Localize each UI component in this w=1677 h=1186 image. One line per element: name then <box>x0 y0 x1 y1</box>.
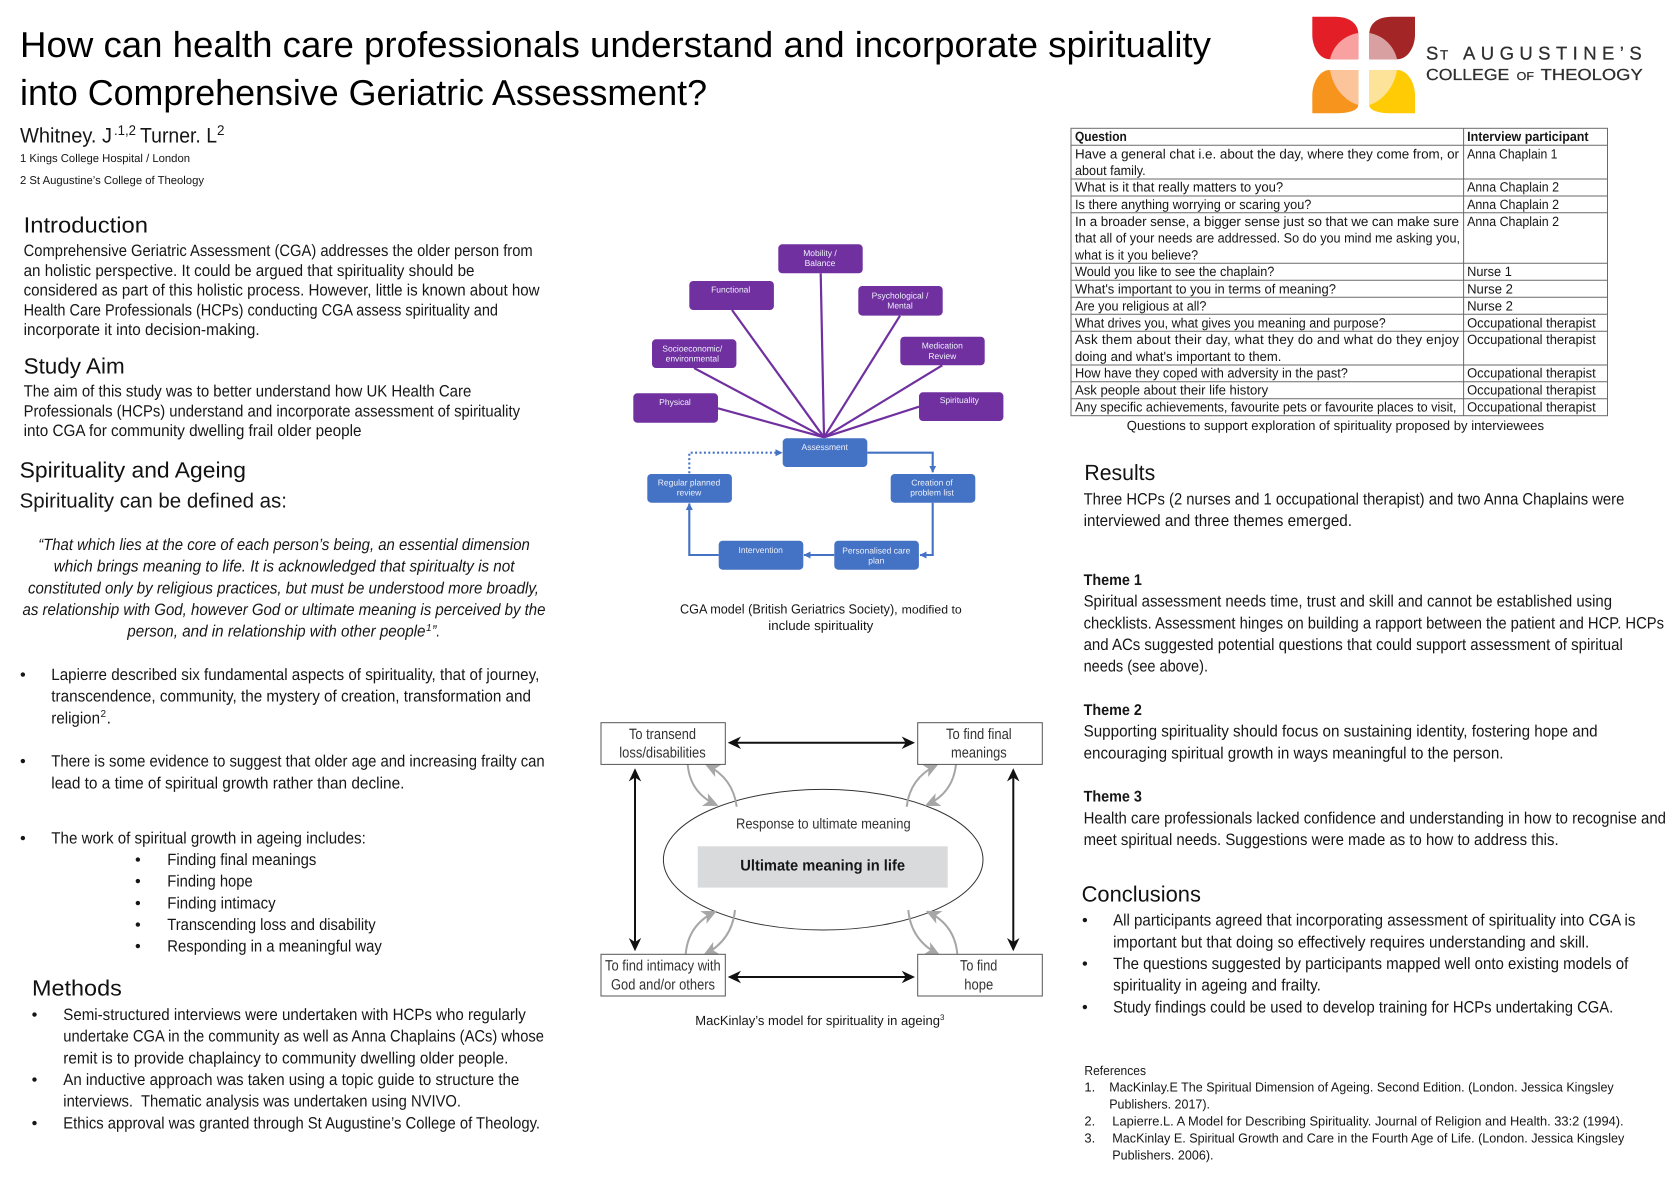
text block: introduction body: Health Care Professionals (HCPs) conducting CGA assess spirituality and <box>24 301 498 319</box>
table column: interview participants: Occupational therapist <box>1467 383 1596 398</box>
table column: questions: In a broader sense, a bigger sense just so that we can make sure <box>1075 214 1459 229</box>
table column: questions: about family. <box>1075 163 1146 178</box>
text block: introduction body <box>24 242 540 339</box>
node: Socioeconomic / environmental <box>652 339 736 368</box>
panel: methods <box>32 976 544 1132</box>
table column: questions: Are you religious at all? <box>1075 298 1206 313</box>
bullet: Lapierre aspects: . <box>106 709 111 727</box>
authors and affiliations: 1 Kings College Hospital / London <box>20 153 190 165</box>
text block: theme 2: encouraging spiritual growth in ways meaningful to the person. <box>1084 744 1504 762</box>
text block: conclusions bullets: spirituality in ageing and frailty. <box>1113 977 1321 995</box>
table header: Question <box>1075 129 1127 144</box>
box: to transcend loss/disabilities: To transend <box>629 726 696 743</box>
table column: questions: Is there anything worrying or scaring you? <box>1075 197 1311 212</box>
bullet: work of spiritual growth list <box>20 829 383 956</box>
node: Personalised care plan <box>834 541 919 570</box>
node: Psychological / Mental: Psychological / <box>872 290 929 300</box>
caption: CGA model: CGA model (British Geriatrics Society), <box>680 601 898 616</box>
text block: theme 2: Theme 2 <box>1084 702 1142 719</box>
node: Intervention <box>719 541 803 570</box>
text block: theme 1: Spiritual assessment needs time, trust and skill and cannot be established using <box>1084 593 1612 611</box>
bullet: work of spiritual growth list: Finding final meanings <box>167 851 316 869</box>
heading: spirituality and ageing: Spirituality and Ageing <box>20 457 246 482</box>
text block: conclusions bullets: • <box>1082 955 1088 973</box>
text block: theme 3 <box>1084 789 1666 849</box>
text block: theme 3: Theme 3 <box>1084 789 1142 806</box>
text block: reference list: 2. <box>1084 1114 1095 1129</box>
table column: questions: What drives you, what gives you meaning and purpose? <box>1075 315 1386 330</box>
quote: definition of spirituality: person, and in relationship with other people <box>126 623 426 641</box>
node: Spirituality <box>919 392 1003 421</box>
table grid <box>1071 128 1608 416</box>
text block: methods bullets: • <box>32 1006 38 1024</box>
text block: conclusions bullets: The questions suggested by participants mapped well onto existing models of <box>1113 955 1629 973</box>
node: Socioeconomic / environmental: environmental <box>666 353 719 363</box>
text block: reference list: MacKinlay E. Spiritual Growth and Care in the Fourth Age of Life. (London. Jessica Kingsley <box>1112 1130 1625 1145</box>
heading: methods: Methods <box>32 976 122 1001</box>
authors and affiliations: Whitney. J <box>20 125 112 148</box>
ellipse: response to ultimate meaning <box>663 789 983 930</box>
text block: study aim body: The aim of this study was to better understand how UK Health Care <box>24 383 471 401</box>
node: Regular planned review: review <box>677 488 702 498</box>
text block: conclusions bullets: All participants agreed that incorporating assessment of spirituality into CGA is <box>1113 912 1635 930</box>
text block: theme 1: and ACs suggested potential questions that could support assessment of spiritual <box>1084 636 1623 654</box>
ellipse: response to ultimate meaning: Response to ultimate meaning <box>736 816 911 832</box>
box: to find final meanings <box>918 723 1042 764</box>
panel: introduction <box>24 212 540 339</box>
quote: definition of spirituality: constituted only by religious practices, but must be understood more broadly, <box>28 579 539 597</box>
text block: methods bullets: remit is to provide chaplaincy to community dwelling older people. <box>63 1049 508 1067</box>
table column: interview participants: Anna Chaplain 2 <box>1467 180 1559 195</box>
table column: interview participants <box>1467 146 1596 415</box>
bullet: Lapierre aspects: • <box>20 666 26 684</box>
table column: questions: Would you like to see the chaplain? <box>1075 264 1274 279</box>
text block: methods bullets: • <box>32 1071 38 1089</box>
box: to transcend loss/disabilities: loss/disabilities <box>619 745 706 762</box>
bullet: spiritual growth evidence: lead to a time of spiritual growth rather than decline. <box>51 774 404 792</box>
quote: definition of spirituality: ”. <box>432 623 440 641</box>
table column: interview participants: Occupational therapist <box>1467 332 1596 347</box>
bullet: Lapierre aspects: Lapierre described six fundamental aspects of spirituality, that of journey, <box>51 666 539 684</box>
table column: interview participants: Nurse 2 <box>1467 281 1513 296</box>
authors and affiliations: Turner. L <box>140 125 217 148</box>
bullet: work of spiritual growth list: The work of spiritual growth in ageing includes: <box>51 829 366 847</box>
text block: conclusions bullets: Study findings could be used to develop training for HCPs undertaking CGA. <box>1113 998 1613 1016</box>
logo wordmark <box>1426 42 1643 84</box>
table column: interview participants: Anna Chaplain 2 <box>1467 214 1559 229</box>
table column: questions: that all of your needs are addressed. So do you mind me asking you, <box>1075 231 1460 246</box>
node: Intervention: Intervention <box>738 545 783 555</box>
table column: questions: How have they coped with adversity in the past? <box>1075 366 1348 381</box>
table: questions to support exploration of spirituality <box>1071 128 1608 416</box>
quote: definition of spirituality: “That which lies at the core of each person’s being, an essential dimension <box>38 536 530 554</box>
text block: conclusions bullets: • <box>1082 998 1088 1016</box>
text block: methods bullets: Ethics approval was granted through St Augustine’s College of Theology. <box>63 1114 540 1132</box>
bullet: spiritual growth evidence: There is some evidence to suggest that older age and increasing frailty can <box>51 753 545 771</box>
text block: theme 1: needs (see above). <box>1084 658 1208 676</box>
node: Medication Review: Medication <box>922 341 963 351</box>
bullet: work of spiritual growth list: Finding hope <box>167 873 253 891</box>
title <box>20 24 1211 113</box>
node: Assessment: Assessment <box>802 442 848 452</box>
text block: theme 1 <box>1084 572 1664 676</box>
chart: MacKinlay model for spirituality in ageing <box>601 723 1042 996</box>
authors and affiliations: .1,2 <box>114 122 136 138</box>
subheading: definition: Spirituality can be defined as: <box>20 490 287 513</box>
logo wordmark: COLLEGE <box>1426 67 1509 84</box>
box: to find intimacy: God and/or others <box>611 976 715 993</box>
node: Medication Review: Review <box>928 351 957 361</box>
box: to find final meanings: To find final <box>946 726 1012 743</box>
text block: results intro: interviewed and three themes emerged. <box>1084 512 1352 530</box>
text block: theme 2 <box>1084 702 1598 762</box>
node: Regular planned review: Regular planned <box>658 477 720 487</box>
text block: results intro <box>1084 490 1624 530</box>
text block: methods bullets: Semi-structured interviews were undertaken with HCPs who regularly <box>63 1006 527 1024</box>
bullet: spiritual growth evidence <box>20 753 545 792</box>
node: Functional <box>689 281 774 310</box>
node: Medication Review <box>900 337 985 365</box>
quote: definition of spirituality: which brings meaning to life. It is acknowledged that spiritualty is not <box>54 558 516 576</box>
heading: references: References <box>1084 1063 1146 1078</box>
panel: conclusions <box>1082 881 1635 1016</box>
table header: Interview participant <box>1467 129 1589 144</box>
caption: MacKinlay model: 3 <box>940 1013 945 1022</box>
node: Personalised care plan: Personalised care <box>842 545 911 555</box>
bullet: work of spiritual growth list: Finding intimacy <box>167 894 276 912</box>
node: Psychological / Mental: Mental <box>887 301 913 311</box>
logo wordmark: S <box>1426 42 1438 63</box>
heading: results: Results <box>1084 460 1155 485</box>
text block: study aim body <box>24 383 521 440</box>
bullet: Lapierre aspects: transcendence, community, the mystery of creation, transformation and <box>51 688 531 706</box>
bullet: Lapierre aspects: religion <box>51 709 100 727</box>
bullet: work of spiritual growth list: Responding in a meaningful way <box>167 938 383 956</box>
node: Spirituality: Spirituality <box>940 395 980 405</box>
table column: interview participants: Anna Chaplain 1 <box>1467 146 1558 161</box>
text block: reference list: Lapierre.L. A Model for Describing Spirituality. Journal of Religion and Health. 33:2 (1994). <box>1112 1114 1624 1129</box>
caption: CGA model <box>680 601 962 633</box>
text block: reference list <box>1084 1080 1625 1162</box>
box: to find intimacy: To find intimacy with <box>605 958 721 975</box>
text block: study aim body: Professionals (HCPs) understand and incorporate assessment of spirituality <box>24 403 521 421</box>
bullet: work of spiritual growth list: • <box>135 938 141 956</box>
text block: methods bullets: • <box>32 1114 38 1132</box>
text block: methods bullets: An inductive approach was taken using a topic guide to structure the <box>63 1071 519 1089</box>
node: Functional: Functional <box>711 284 750 294</box>
text block: theme 1: Theme 1 <box>1084 572 1142 589</box>
quote: definition of spirituality <box>22 536 546 641</box>
node: Mobility / Balance: Mobility / <box>803 248 837 258</box>
table column: questions: doing and what's important to them. <box>1075 349 1281 364</box>
text block: introduction body: considered as part of this holistic process. However, little is known about how <box>24 282 540 300</box>
title: How can health care professionals understand and incorporate spirituality <box>20 24 1211 65</box>
table column: questions: Have a general chat i.e. about the day, where they come from, or <box>1075 146 1460 161</box>
table column: interview participants: Occupational therapist <box>1467 366 1596 381</box>
panel: references <box>1084 1063 1625 1162</box>
table column: questions <box>1074 146 1460 415</box>
arrows: blue care cycle <box>689 453 933 555</box>
node: Mobility / Balance: Balance <box>805 258 836 268</box>
bullet: Lapierre aspects <box>20 666 539 727</box>
heading: conclusions: Conclusions <box>1082 881 1201 906</box>
logo: St Augustine's College of Theology <box>1312 17 1643 113</box>
text block: conclusions bullets: important but that doing so effectively requires understanding and skill. <box>1113 933 1589 951</box>
table column: interview participants: Occupational therapist <box>1467 315 1596 330</box>
table column: questions: Ask them about their day, what they do and what do they enjoy <box>1075 332 1459 347</box>
text block: study aim body: into CGA for community dwelling frail older people <box>24 422 361 440</box>
node: Assessment <box>783 438 867 467</box>
text block: conclusions bullets: • <box>1082 912 1088 930</box>
chart: CGA model diagram <box>633 244 1003 570</box>
text block: reference list: Publishers. 2006). <box>1112 1147 1214 1162</box>
caption: questions table: Questions to support exploration of spirituality proposed by interviewees <box>1127 418 1544 433</box>
arrows: black double-headed <box>629 736 1020 983</box>
bullet: work of spiritual growth list: Transcending loss and disability <box>167 916 376 934</box>
logo wordmark: THEOLOGY <box>1541 67 1643 84</box>
node: Creation of problem list: Creation of <box>911 477 953 487</box>
bullet: work of spiritual growth list: • <box>135 916 141 934</box>
panel: results <box>1084 460 1666 849</box>
text block: reference list: 1. <box>1084 1080 1095 1095</box>
table column: questions: Ask people about their life history <box>1075 383 1268 398</box>
text block: introduction body: an holistic perspective. It could be argued that spirituality should be <box>24 262 474 280</box>
title: into Comprehensive Geriatric Assessment? <box>20 72 707 113</box>
authors and affiliations: 2 <box>217 122 225 138</box>
node: Psychological / Mental <box>858 286 943 316</box>
box: to find hope <box>918 954 1042 996</box>
quote: definition of spirituality: as relationship with God, however God or ultimate meaning is perceived by the <box>22 601 546 619</box>
caption: MacKinlay model: MacKinlay’s model for spirituality in ageing <box>695 1013 940 1028</box>
text block: methods bullets <box>32 1006 544 1132</box>
text block: methods bullets: interviews. Thematic analysis was undertaken using NVIVO. <box>63 1093 461 1111</box>
text block: reference list: Publishers. 2017). <box>1109 1096 1210 1111</box>
text block: reference list: MacKinlay.E The Spiritual Dimension of Ageing. Second Edition. (London. Jessica Kingsley <box>1109 1080 1614 1095</box>
ellipse: response to ultimate meaning: Ultimate meaning in life <box>740 858 905 875</box>
bullet: spiritual growth evidence: • <box>20 753 26 771</box>
connectors: purple domain lines <box>694 273 942 437</box>
caption: CGA model: include spirituality <box>768 618 874 633</box>
logo wordmark: AUGUSTINE’S <box>1463 42 1642 63</box>
node: Personalised care plan: plan <box>868 556 885 566</box>
table column: questions: What's important to you in terms of meaning? <box>1075 281 1336 296</box>
authors and affiliations <box>20 122 225 187</box>
heading: study aim: Study Aim <box>24 353 125 378</box>
text block: theme 3: meet spiritual needs. Suggestions were made as to how to address this. <box>1084 831 1559 849</box>
text block: introduction body: incorporate it into decision-making. <box>24 321 260 339</box>
bullet: Lapierre aspects: 2 <box>100 709 106 720</box>
bullet: work of spiritual growth list: • <box>20 829 26 847</box>
table column: interview participants: Nurse 2 <box>1467 298 1513 313</box>
icon: four petal cross <box>1312 17 1415 113</box>
table column: interview participants: Anna Chaplain 2 <box>1467 197 1559 212</box>
arrows: grey curved feedback <box>686 764 957 954</box>
box: to transcend loss/disabilities <box>601 723 725 764</box>
table column: interview participants: Nurse 1 <box>1467 264 1512 279</box>
box: to find hope: hope <box>964 976 993 993</box>
quote: definition of spirituality: 1 <box>426 623 432 634</box>
authors and affiliations: 2 St Augustine’s College of Theology <box>20 175 204 187</box>
text block: methods bullets: undertake CGA in the community as well as Anna Chaplains (ACs) whose <box>63 1028 544 1046</box>
node: Physical <box>633 393 718 423</box>
bullet: work of spiritual growth list: • <box>135 851 141 869</box>
bullet: work of spiritual growth list: • <box>135 873 141 891</box>
box: to find hope: To find <box>960 958 997 975</box>
node: Socioeconomic / environmental: Socioeconomic/ <box>662 343 723 353</box>
text block: theme 2: Supporting spirituality should focus on sustaining identity, fostering hope and <box>1084 723 1598 741</box>
node: Mobility / Balance <box>778 244 863 273</box>
panel: spirituality and ageing <box>20 457 546 956</box>
table column: interview participants: Occupational therapist <box>1467 400 1596 415</box>
text block: results intro: Three HCPs (2 nurses and 1 occupational therapist) and two Anna Chaplains were <box>1084 490 1624 508</box>
node: Creation of problem list: problem list <box>910 488 954 498</box>
table column: questions: Any specific achievements, favourite pets or favourite places to visit, <box>1075 400 1456 415</box>
logo wordmark: OF <box>1517 71 1534 83</box>
caption: CGA model: modified to <box>902 602 962 616</box>
heading: introduction: Introduction <box>24 212 148 237</box>
node: Creation of problem list <box>891 474 975 503</box>
text block: introduction body: Comprehensive Geriatric Assessment (CGA) addresses the older person from <box>24 242 533 260</box>
table column: questions: what is it you believe? <box>1074 247 1198 262</box>
table column: questions: What is it that really matters to you? <box>1075 180 1283 195</box>
text block: reference list: 3. <box>1084 1130 1095 1145</box>
bullet: work of spiritual growth list: • <box>135 894 141 912</box>
table header <box>1075 129 1589 144</box>
panel: study aim <box>24 353 521 440</box>
node: Regular planned review <box>647 474 732 503</box>
node: Physical: Physical <box>659 397 691 407</box>
box: to find intimacy <box>601 954 725 996</box>
box: to find final meanings: meanings <box>951 745 1007 762</box>
logo wordmark: T <box>1440 47 1448 62</box>
text block: conclusions bullets <box>1082 912 1635 1016</box>
